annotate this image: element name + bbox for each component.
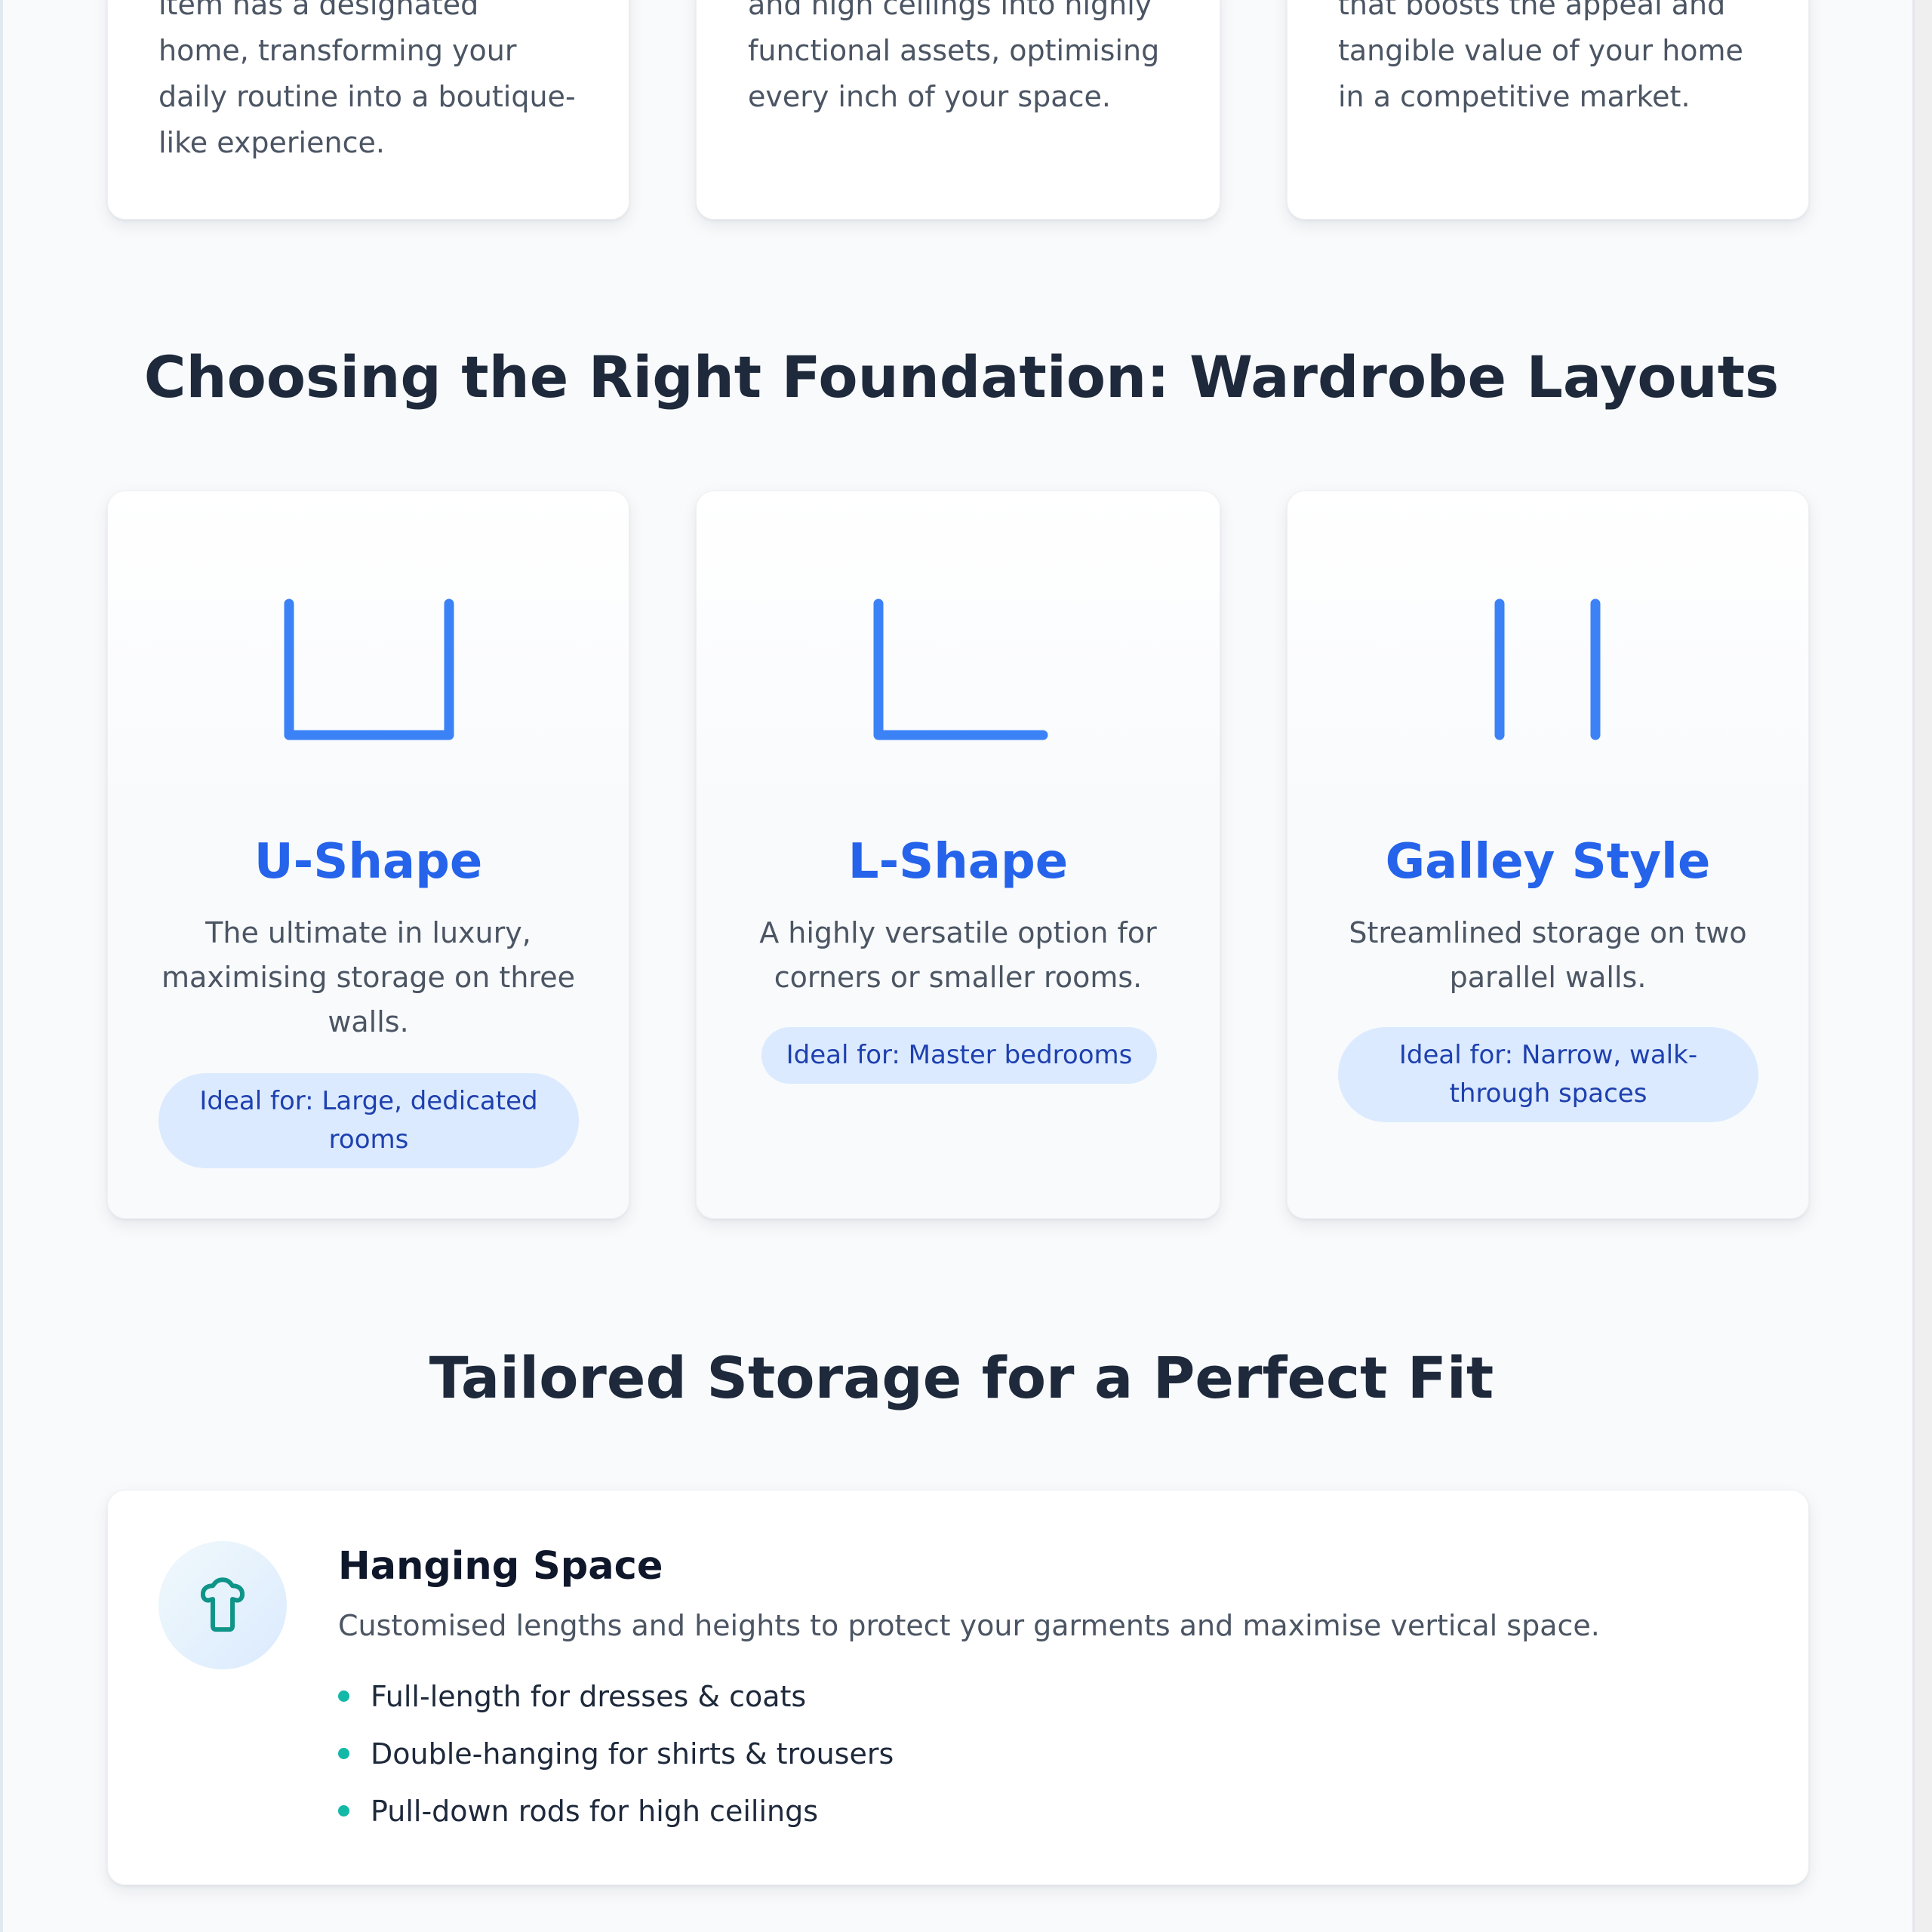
panel: Galley Style (1287, 491, 1809, 1219)
text: Galley description: Streamlined storage on two (1349, 916, 1747, 949)
text: benefit 2: every inch of your space. (748, 80, 1111, 113)
text: L-Shape description (759, 916, 1157, 994)
text: U-Shape description: walls. (328, 1005, 409, 1038)
panel: hanging space (107, 1490, 1809, 1885)
text: benefit 1: daily routine into a boutique- (158, 80, 576, 113)
icon: galley lines (1494, 599, 1600, 740)
title: U-Shape: U-Shape (254, 834, 482, 890)
panel: benefit card 3 (1287, 0, 1809, 220)
text: benefit 3: tangible value of your home (1338, 34, 1743, 67)
text: benefit 2: functional assets, optimising (748, 34, 1159, 67)
title: L-Shape: L-Shape (848, 834, 1068, 890)
text: benefit 3 (1338, 0, 1743, 113)
title: Hanging Space: Hanging Space (338, 1544, 663, 1589)
panel: U-Shape (107, 491, 629, 1219)
text: hanging description: Customised lengths and heights to protect your garments and maximise vertical space. (338, 1609, 1600, 1642)
heading: tailored storage: Tailored Storage for a Perfect Fit (429, 1344, 1494, 1411)
icon: U shape (284, 599, 454, 740)
text: Galley description (1349, 916, 1747, 994)
list: hanging options: Full-length for dresses & coats (371, 1680, 806, 1713)
icon: L shape (874, 599, 1048, 740)
pill: ideal for narrow spaces: Ideal for: Narrow, walk- (1399, 1040, 1697, 1070)
list: hanging options: Pull-down rods for high ceilings (371, 1795, 818, 1828)
pill: ideal for master bedrooms: Ideal for: Master bedrooms (786, 1040, 1132, 1070)
panel: L-Shape (696, 491, 1220, 1219)
text: benefit 3: in a competitive market. (1338, 80, 1690, 113)
text: benefit 1: home, transforming your (158, 34, 516, 67)
text: benefit 1: like experience. (158, 126, 385, 159)
panel: benefit card 1 (107, 0, 629, 220)
pill: ideal for large rooms: Ideal for: Large, dedicated (199, 1086, 538, 1116)
text: L-Shape description: corners or smaller rooms. (774, 961, 1142, 994)
text: benefit 1 (158, 0, 576, 159)
pill: ideal for master bedrooms (761, 1027, 1157, 1084)
heading: wardrobe layouts: Choosing the Right Foundation: Wardrobe Layouts (144, 343, 1779, 411)
text: benefit 2 (748, 0, 1159, 113)
text: U-Shape description (162, 916, 575, 1038)
text: L-Shape description: A highly versatile option for (759, 916, 1157, 949)
list: hanging options: Double-hanging for shirts & trousers (371, 1737, 894, 1770)
title: Galley Style: Galley Style (1386, 834, 1710, 890)
panel: benefit card 2 (696, 0, 1220, 220)
text: U-Shape description: The ultimate in luxury, (205, 916, 531, 949)
text: Galley description: parallel walls. (1450, 961, 1646, 994)
list: hanging options (338, 1680, 894, 1828)
icon: shirt in circle (158, 1541, 287, 1669)
pill: ideal for narrow spaces: through spaces (1450, 1078, 1647, 1109)
pill: ideal for narrow spaces (1338, 1027, 1758, 1122)
text: U-Shape description: maximising storage on three (162, 961, 575, 994)
pill: ideal for large rooms: rooms (329, 1124, 408, 1155)
pill: ideal for large rooms (158, 1073, 579, 1168)
